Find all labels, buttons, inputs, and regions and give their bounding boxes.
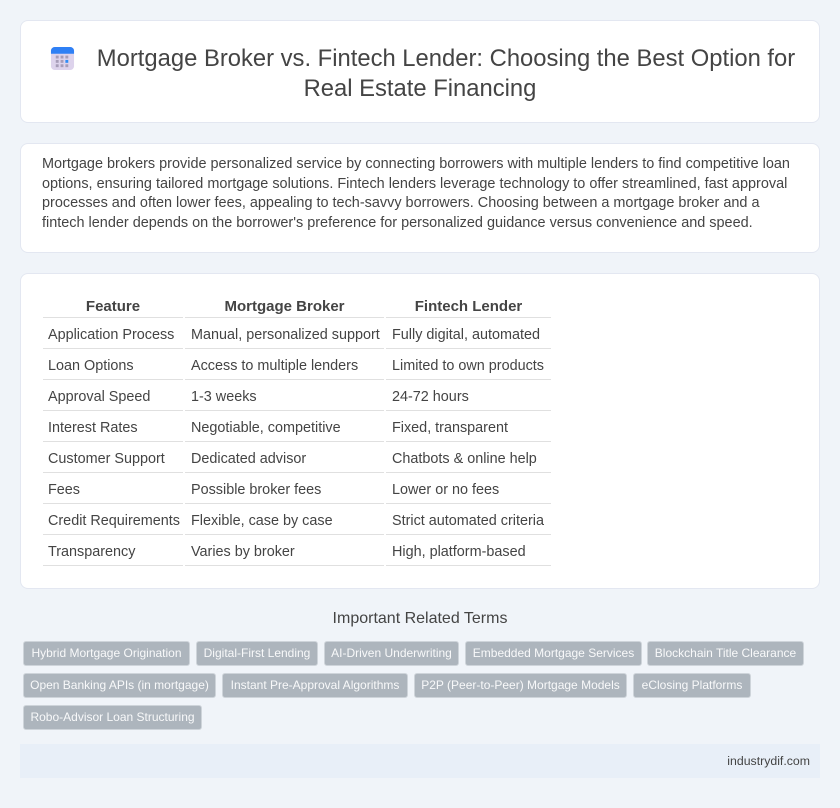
tag list: related terms: P2P (Peer-to-Peer) Mortgage Models — [421, 678, 620, 692]
table rows: Varies by broker — [191, 544, 295, 560]
table rows: Fixed, transparent — [392, 420, 508, 436]
text block: description: fintech lender depends on the borrower's preference for personalized guidance versus convenience and speed. — [42, 215, 753, 231]
tag list: related terms: Embedded Mortgage Services — [473, 646, 634, 660]
table rows: Fees — [48, 482, 80, 498]
table rows: Chatbots & online help — [392, 451, 537, 467]
table rows: Manual, personalized support — [191, 327, 380, 343]
panel: description — [20, 143, 820, 253]
table rows: 24-72 hours — [392, 389, 469, 405]
title: Real Estate Financing — [304, 75, 536, 102]
table rows: High, platform-based — [392, 544, 526, 560]
tag list: related terms: Blockchain Title Clearance — [655, 646, 796, 660]
text block: description: processes and often lower fees, appealing to tech-savvy borrowers. Choosing between a mortgage broker and a — [42, 195, 759, 211]
title — [97, 45, 795, 102]
text block: description: options, ensuring tailored mortgage solutions. Fintech lenders leverage technology to offer streamlined, fast approval — [42, 176, 787, 192]
tag list: related terms — [23, 641, 804, 730]
title: Mortgage Broker vs. Fintech Lender: Choosing the Best Option for — [97, 45, 795, 72]
table rows: Approval Speed — [48, 389, 150, 405]
tag list: related terms: eClosing Platforms — [642, 678, 742, 692]
table rows: Strict automated criteria — [392, 513, 544, 529]
tag list: related terms: AI-Driven Underwriting — [331, 646, 452, 660]
tag list: related terms: Instant Pre-Approval Algorithms — [231, 678, 399, 692]
table rows: 1-3 weeks — [191, 389, 257, 405]
panel: header — [20, 20, 820, 123]
table rows: Transparency — [48, 544, 135, 560]
table rows: Negotiable, competitive — [191, 420, 341, 436]
table rows: Fully digital, automated — [392, 327, 540, 343]
table rows: Flexible, case by case — [191, 513, 333, 529]
text block: description: Mortgage brokers provide personalized service by connecting borrowers with multiple lenders to find competitive loan — [42, 156, 790, 172]
table rows — [43, 317, 551, 566]
text block: description — [42, 156, 790, 231]
table rows: Possible broker fees — [191, 482, 321, 498]
table rows: Lower or no fees — [392, 482, 499, 498]
tag list: related terms: Hybrid Mortgage Origination — [31, 646, 182, 660]
table rows: Limited to own products — [392, 358, 544, 374]
tag list: related terms: Open Banking APIs (in mortgage) — [30, 678, 209, 692]
table header: Fintech Lender — [415, 298, 522, 315]
table rows: Interest Rates — [48, 420, 138, 436]
table header: Feature — [86, 298, 140, 315]
table rows: Application Process — [48, 327, 174, 343]
table rows: Access to multiple lenders — [191, 358, 358, 374]
table rows: Loan Options — [48, 358, 134, 374]
footer — [20, 744, 820, 778]
footer source text: industrydif.com — [727, 754, 810, 768]
table header — [86, 298, 522, 315]
table header: Mortgage Broker — [224, 298, 345, 315]
heading: related terms: Important Related Terms — [333, 610, 507, 627]
tag list: related terms: Robo-Advisor Loan Structuring — [30, 710, 195, 724]
panel: comparison table — [20, 273, 820, 589]
tag list: related terms: Digital-First Lending — [204, 646, 310, 660]
table rows: Credit Requirements — [48, 513, 180, 529]
table rows: Dedicated advisor — [191, 451, 306, 467]
table rows: Customer Support — [48, 451, 165, 467]
icon: calendar — [50, 47, 74, 70]
